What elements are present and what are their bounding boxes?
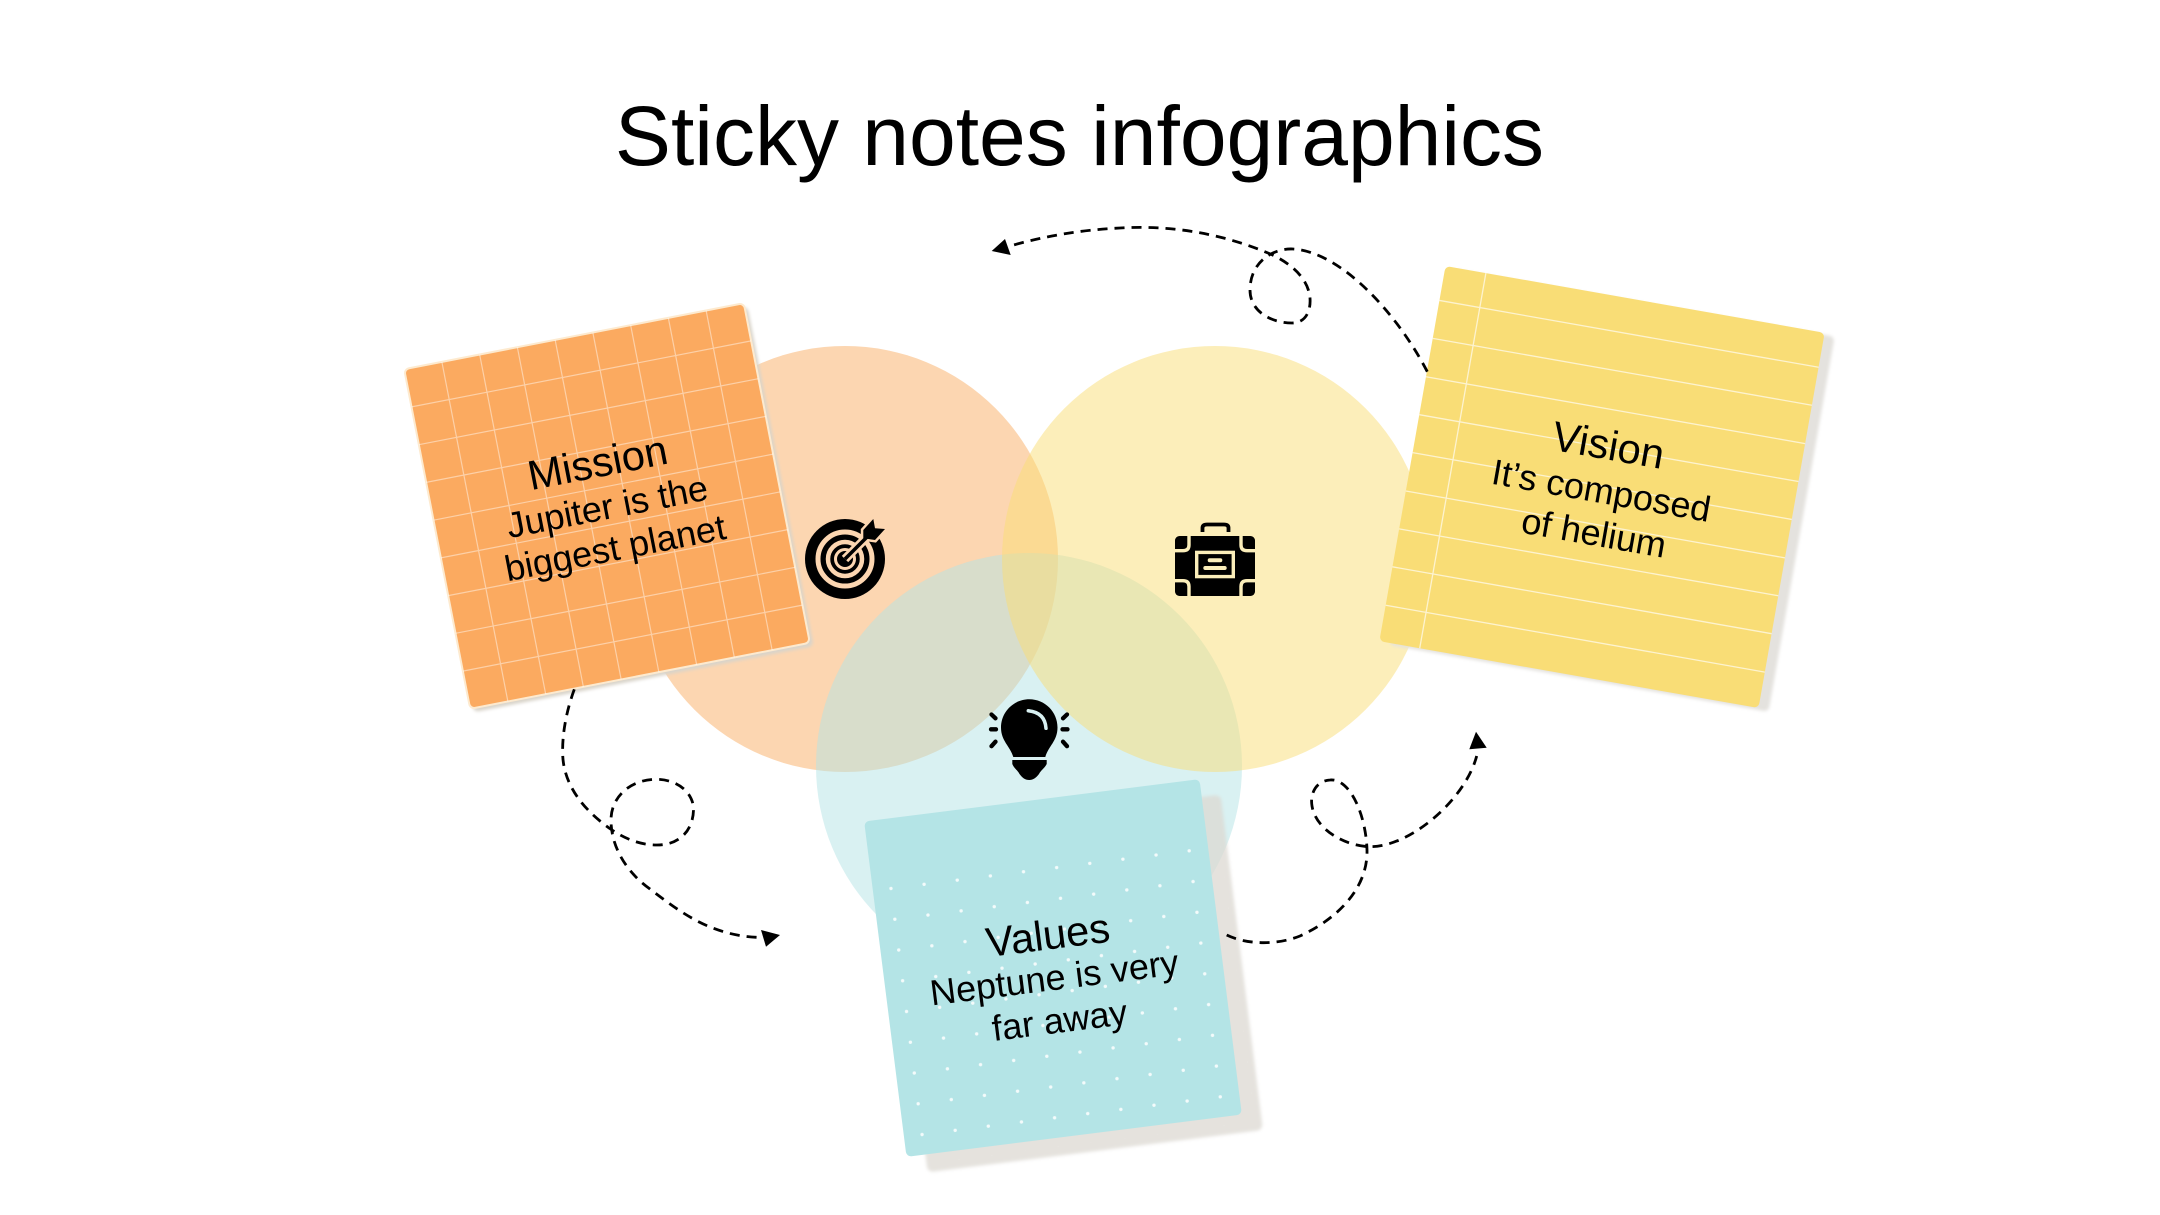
- panel: vision note: of helium: [1518, 500, 1669, 566]
- icon: light bulb: [991, 699, 1068, 780]
- values heading: Values: [983, 904, 1112, 966]
- icon: target with dart: [805, 519, 885, 599]
- panel: vision note: [1379, 266, 1835, 712]
- vision heading: Vision: [1549, 412, 1668, 478]
- arrow: vision to mission: [992, 227, 1427, 372]
- values text: Neptune is very: [928, 941, 1181, 1013]
- mission text: Jupiter is the: [503, 467, 711, 546]
- panel: mission note: biggest planet: [501, 506, 729, 589]
- arrow: values to vision: [1227, 732, 1487, 943]
- arrow: mission to values: [563, 689, 780, 947]
- title: Sticky notes infographics: [615, 89, 1544, 183]
- panel: values note: [864, 777, 1263, 1175]
- venn diagram circles: [632, 346, 1428, 979]
- mission heading: Mission: [524, 426, 671, 499]
- panel: values note: far away: [990, 991, 1130, 1049]
- vision text: It’s composed: [1489, 451, 1714, 530]
- panel: mission note: [404, 303, 814, 713]
- icon: briefcase: [1175, 524, 1255, 596]
